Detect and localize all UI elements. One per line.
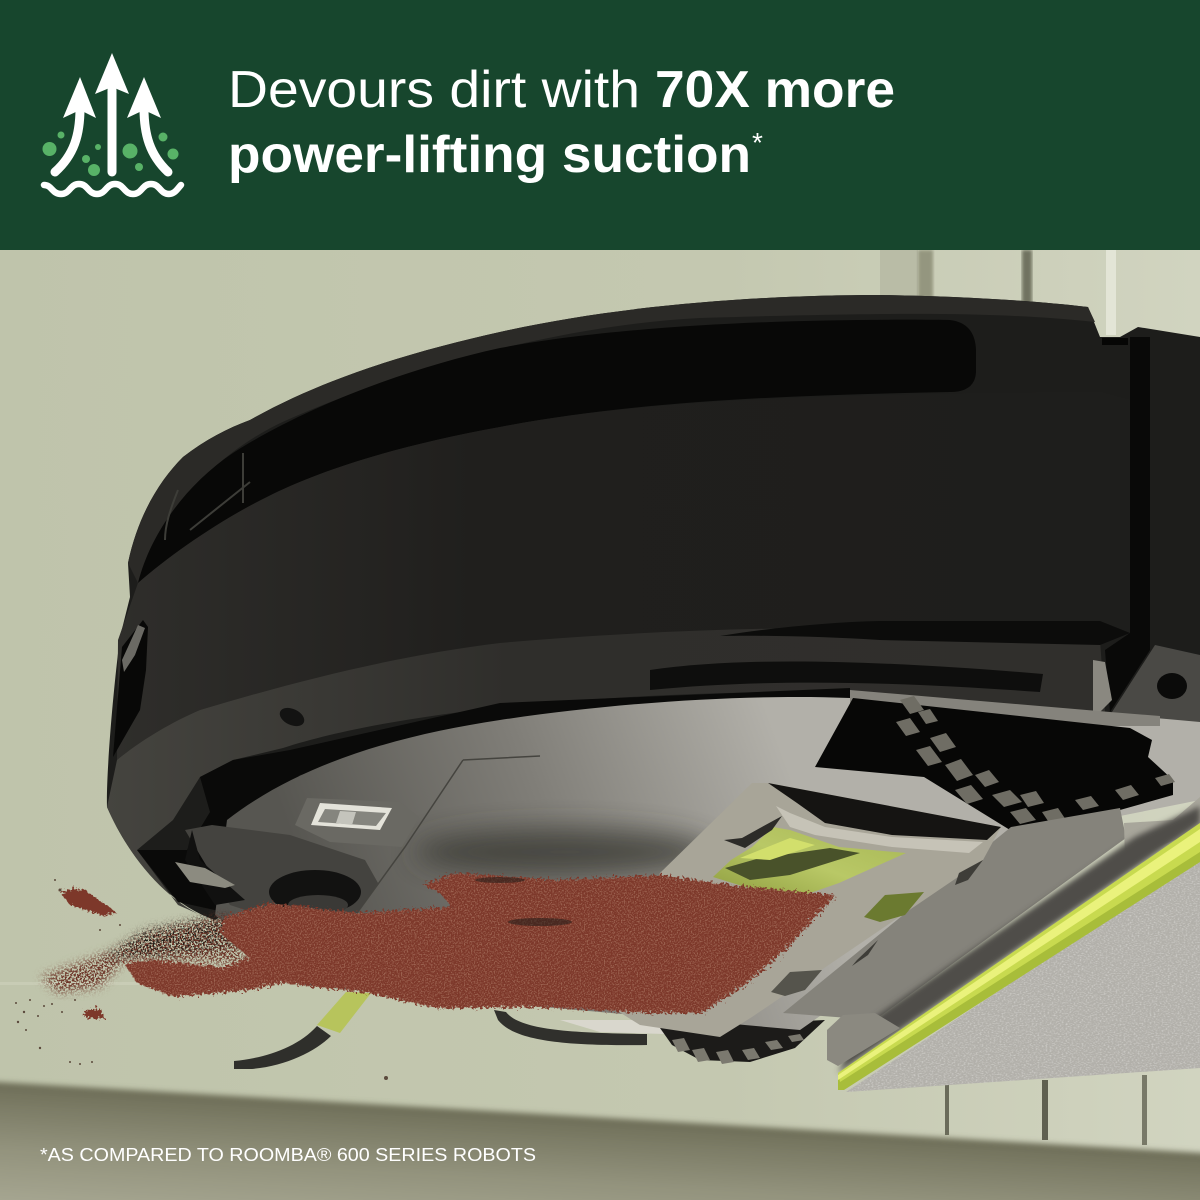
- header bar: [0, 0, 1200, 250]
- background: room scene: [0, 250, 1200, 1200]
- mop fabric: [846, 858, 1200, 1092]
- scattered dust cloud: [41, 915, 250, 993]
- vent grille: [165, 453, 250, 540]
- brush: lime bristle base: [317, 992, 371, 1033]
- dirt spread: [15, 873, 835, 1080]
- top recess and side vent: [138, 320, 976, 583]
- robot: black wedge behind plate: [137, 688, 850, 912]
- icon: suction arrows lifting dirt: [42, 53, 181, 194]
- robot: drive wheel tread bottom: [660, 1020, 825, 1064]
- title: *: [752, 127, 763, 158]
- dust bin and suction opening: [600, 783, 1126, 1037]
- robot: underside plate: [215, 690, 1200, 1030]
- loose dust specks: [15, 879, 388, 1080]
- robot: top shell and side: [107, 295, 1200, 920]
- right side block: [1105, 337, 1150, 712]
- footnote: *AS COMPARED TO ROOMBA® 600 SERIES ROBOTS: [40, 1145, 536, 1165]
- main band: [117, 392, 1130, 760]
- upper lip highlight: [128, 295, 1095, 583]
- title: [228, 61, 895, 184]
- caster wheel and cliff sensor: [175, 798, 419, 918]
- mop lime strip: [838, 823, 1200, 1090]
- light piece and mount: [1093, 660, 1112, 712]
- lower rim: [107, 628, 1105, 920]
- mop pad: [827, 797, 1200, 1092]
- title: 70X more: [655, 61, 895, 119]
- title: power-lifting suction: [228, 126, 751, 184]
- side brushes: [234, 992, 740, 1069]
- left port: [113, 620, 148, 757]
- title: Devours dirt with: [228, 61, 640, 119]
- wheel well with tread: [815, 696, 1175, 830]
